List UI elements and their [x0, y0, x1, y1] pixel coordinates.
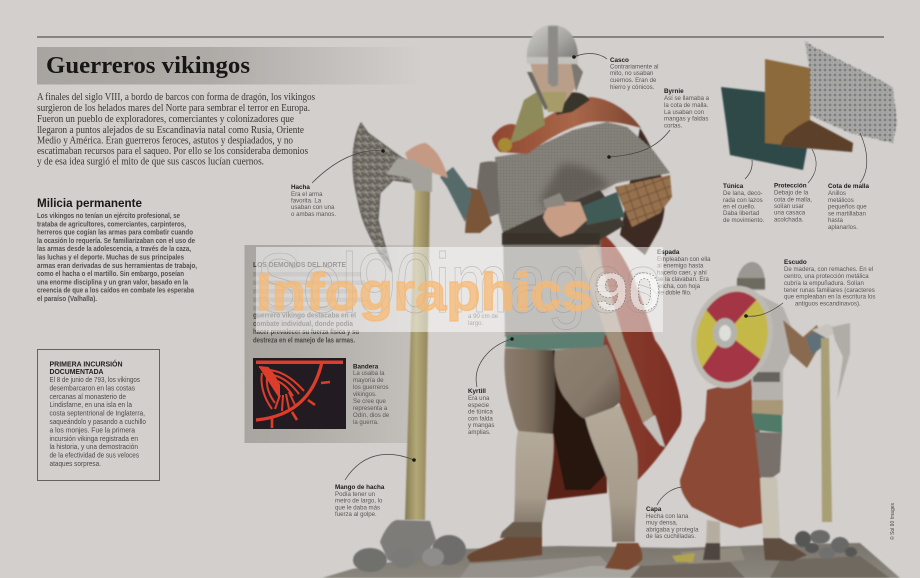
callout: Protección: Protección: [774, 182, 807, 190]
callout: Túnica: Daba libertad: [723, 210, 759, 217]
section body: las luchas y el deporte. Muchas de sus principales: [37, 252, 184, 262]
panel body: guerrero vikingo destacaba en el: [253, 310, 356, 320]
intro text: escatimaban recursos para el saqueo. Por ello se los consideraba demonios: [37, 146, 308, 157]
callout: Protección: cota de malla,: [774, 196, 812, 204]
back warrior helmet: [737, 262, 765, 290]
callout: Hacha: favorita. La: [291, 198, 322, 204]
label: Bandera: Bandera: [353, 364, 379, 370]
label fragment under watermark: largo.: [468, 320, 484, 327]
callout: Hacha: o ambas manos.: [291, 211, 336, 218]
label: Bandera: representa a: [353, 405, 388, 412]
callout: Túnica: De lana, deco-: [723, 190, 763, 197]
top rule: [37, 36, 884, 38]
callout: Byrnie: mangas y faldas: [664, 116, 708, 122]
axe socket: [386, 158, 432, 192]
callout: Espada: al enemigo hasta: [657, 263, 704, 270]
callout: Cota de malla: se martillaban: [828, 210, 866, 218]
section body: la ocasión lo requería. Se familiarizaban con el uso de: [37, 236, 195, 245]
callout: Cota de malla: hasta: [828, 217, 844, 224]
tunic skirt and hem: [503, 235, 606, 350]
callout: Espada: Empleaban con ella: [657, 256, 711, 263]
section body: herreros que cogían las armas para combatir cuando: [37, 228, 193, 236]
callout box: Primera incursión documentada: DOCUMENTADA: [50, 369, 104, 376]
intro text: y de esa idea surgió el mito de que sus cascos lucían cuernos.: [37, 156, 264, 168]
intro text: Fueron un pueblo de exploradores, comerciantes y colonizadores que: [37, 114, 294, 125]
leg wraps: [500, 405, 638, 542]
callout: Casco: Contrariamente al: [610, 64, 658, 70]
callout: Protección: una casaca: [774, 210, 806, 217]
intro text: A finales del siglo VIII, a bordo de barcos con forma de dragón, los vikingos: [37, 92, 315, 103]
callout: Túnica: [723, 160, 765, 224]
callout: Casco: Casco: [610, 57, 629, 64]
section body: las armas desde la adolescencia, a través de la caza,: [37, 244, 191, 253]
callout: Kyrtill: y mangas: [468, 422, 494, 429]
panel body: combate individual, donde podía: [253, 319, 354, 328]
section body: el paraíso (Valhalla).: [37, 294, 97, 303]
callout box: Primera incursión documentada: la historia, y una demostración: [50, 442, 138, 451]
callout box: Primera incursión documentada: Lindisfarne, en una isla en la: [50, 400, 133, 409]
intro text: Medio y América. Eran guerreros feroces, astutos y despiadados, y no: [37, 136, 293, 146]
watermark: Sol90images: [256, 236, 660, 330]
belt: [502, 233, 600, 245]
callout: Túnica: Túnica: [723, 183, 744, 190]
ground platform: [322, 543, 900, 578]
trousers: [504, 345, 620, 434]
callout: Casco: mito, no usaban: [610, 70, 653, 77]
label: Bandera: [353, 364, 390, 426]
section body: Los vikingos no tenían un ejército profesional, se: [37, 211, 180, 220]
sword and scabbard: [578, 245, 665, 447]
callout: Mango de hacha: Podía tener un: [335, 491, 375, 498]
section body: una enorme disciplina y un gran valor, basado en la: [37, 277, 189, 286]
callout: Byrnie: [607, 88, 710, 159]
head and helmet: [510, 25, 590, 143]
callout box: Primera incursión documentada: [38, 350, 160, 480]
callout: Escudo: antiguos escandinavos).: [795, 300, 861, 308]
callout box: Primera incursión documentada: incursión vikinga registrada en: [50, 434, 138, 443]
callout: Espada: de doble filo.: [657, 290, 692, 297]
panel body: destreza en el manejo de las armas.: [253, 336, 355, 344]
back warrior torso: [748, 290, 797, 433]
panel body: [253, 310, 359, 344]
label fragment under watermark: a 90 cm de: [468, 313, 499, 320]
callout: Capa: de las cuchilladas.: [646, 533, 696, 540]
label: Bandera: Odín, dios de: [353, 412, 390, 419]
axe: [353, 123, 440, 520]
callout: Espada: [657, 249, 711, 297]
callout: Hacha: usaban con una: [291, 204, 335, 211]
callout box: Primera incursión documentada: El 8 de junio de 793, los vikingos: [50, 375, 140, 384]
callout: Kyrtill: [468, 337, 514, 436]
callout: Espada: ancha, con hoja: [657, 283, 701, 290]
callout: Escudo: [744, 259, 875, 318]
callout box: Primera incursión documentada: ataques sorpresa.: [50, 459, 101, 468]
rocks right: [795, 530, 857, 559]
callout: Protección: acolchada.: [774, 217, 804, 224]
back cape: [547, 128, 682, 500]
callout: Kyrtill: especie: [468, 402, 490, 409]
hand on sword: [543, 193, 587, 237]
label: Bandera: los guerreros: [353, 384, 389, 391]
callout: Hacha: Era el arma: [291, 191, 323, 198]
callout: Espada: Espada: [657, 249, 680, 256]
callout: Escudo: De madera, con remaches. En el: [784, 266, 873, 273]
section: Milicia permanente: [37, 196, 197, 303]
back warrior cape: [680, 378, 763, 528]
callout box: Primera incursión documentada: desembarcaron en las costas: [50, 383, 135, 392]
callout: Hacha: Hacha: [291, 184, 310, 191]
torso chainmail: [477, 122, 670, 245]
callout: Capa: muy densa,: [646, 520, 678, 526]
panel body: hacer prevalecer su fuerza física y su: [253, 327, 359, 336]
callout: Túnica: de movimiento.: [723, 217, 765, 224]
section body: [37, 211, 197, 303]
panel: Los demonios del norte background: [244, 245, 416, 443]
callout: Mango de hacha: fuerza al golpe.: [335, 511, 377, 518]
swatch: chain mail: [805, 41, 897, 143]
callout: Capa: Capa: [646, 506, 662, 513]
callout: Túnica: rada con lazos: [723, 197, 763, 204]
callout box: Primera incursión documentada: a los monjes. Fue la primera: [50, 425, 136, 434]
label: Bandera: Se cree que: [353, 398, 386, 405]
callout: Capa: Hecha con lana: [646, 513, 689, 520]
panel heading: LOS DEMONIOS DEL NORTE: [253, 260, 346, 269]
section body: trataba de agricultores, comerciantes, carpinteros,: [37, 219, 186, 228]
callout: Casco: [572, 53, 658, 91]
label: Bandera: mayoría de: [353, 377, 384, 384]
callout: Byrnie: La usaban con: [664, 109, 704, 116]
callout: Byrnie: Byrnie: [664, 88, 684, 95]
callout: Byrnie: cortas.: [664, 122, 683, 130]
callout: Escudo: cubría la empuñadura. Solían: [784, 280, 864, 287]
panel text: Los demonios del norte: [253, 260, 365, 344]
callout: Hacha: [291, 149, 385, 218]
callout: Protección: Debajo de la: [774, 190, 809, 196]
callout: Cota de malla: pequeños que: [828, 204, 867, 210]
title band: [37, 47, 422, 84]
callout: Cota de malla: metálicos: [828, 197, 854, 204]
intro text: surgieron de los helados mares del Norte para sembrar el terror en Europa.: [37, 103, 310, 114]
callout: Casco: cuernos. Eran de: [610, 77, 657, 84]
watermark: 90: [595, 263, 661, 322]
callout box: Primera incursión documentada: cercanas al monasterio de: [50, 392, 126, 401]
callout: Mango de hacha: metro de largo, lo: [335, 498, 383, 504]
section body: creencia de que a los caídos en combate les esperaba: [37, 286, 195, 295]
callout: Capa: abrigaba y protegía: [646, 526, 699, 534]
back warrior arm: [783, 320, 840, 368]
intro text: [37, 92, 315, 168]
callout: Kyrtill: Kyrtill: [468, 388, 486, 395]
callout: Byrnie: la cota de malla.: [664, 102, 709, 109]
callout box: Primera incursión documentada: saqueándolo y pasando a cuchillo: [50, 417, 146, 426]
callout: Cota de malla: [828, 133, 869, 231]
shield: [691, 284, 769, 390]
callout: Escudo: centro, una protección metálica: [784, 273, 869, 280]
callout: Mango de hacha: que le daba más: [335, 504, 380, 512]
main viking warrior: [405, 25, 682, 570]
callout: Cota de malla: aplanarlos.: [828, 224, 858, 231]
swatch: leather protection: [765, 59, 853, 152]
callout: Escudo: Escudo: [784, 259, 807, 266]
callout: Protección: solían usar: [774, 203, 804, 210]
callout: Protección: [774, 149, 816, 224]
boots: [467, 537, 642, 570]
section body: armas eran derivadas de sus herramientas de trabajo,: [37, 261, 197, 270]
callout: Espada: hacerlo caer, y ahí: [657, 269, 707, 276]
back warrior with shield: [680, 262, 850, 561]
callout: Escudo: que empleaban en la escritura los: [784, 294, 875, 300]
label: Bandera: vikingos.: [353, 391, 377, 398]
callout: Kyrtill: de túnica: [468, 408, 493, 416]
axe handle: [405, 190, 430, 520]
right vambrace and forearm: [580, 175, 672, 227]
callout box: Primera incursión documentada: costa septentrional de Inglaterra,: [50, 409, 145, 418]
label: Bandera: La usaba la: [353, 370, 385, 377]
axe head: [353, 123, 415, 272]
shoulder scarf: [492, 97, 641, 154]
callout: Casco: hierro y cónicos.: [610, 84, 655, 91]
callout: Túnica: en el cuello.: [723, 204, 756, 210]
label fragment under watermark: [468, 313, 499, 327]
intro text: llegaron a puntos alejados de su Escandinavia natal como Rusia, Oriente: [37, 125, 304, 136]
callout: Mango de hacha: Mango de hacha: [335, 484, 385, 491]
watermark: Infographics: [256, 263, 593, 322]
credit: © Sol 90 Images: [889, 503, 896, 540]
callout: Mango de hacha: [335, 454, 416, 518]
icon: raven flag: [253, 358, 346, 429]
left sleeve and forearm: [405, 143, 492, 233]
rocks left: [353, 520, 466, 572]
callout: Cota de malla: Anillos: [828, 190, 846, 197]
material swatches: [721, 41, 897, 170]
callout box: Primera incursión documentada: de la efectividad de sus veloces: [50, 451, 139, 460]
callout: Capa: [646, 487, 699, 540]
back warrior legs: [703, 432, 807, 561]
callout: Escudo: tener runas familiares (caracteres: [784, 287, 875, 294]
callout: Kyrtill: amplias.: [468, 429, 491, 436]
hand fingers: [408, 145, 440, 170]
swatch: tunic: [721, 87, 807, 170]
title: Guerreros vikingos: [46, 53, 250, 79]
callout: Cota de malla: Cota de malla: [828, 183, 869, 190]
callout: Byrnie: Así se llamaba a: [664, 95, 710, 102]
section heading: Milicia permanente: [37, 196, 142, 210]
callout box: Primera incursión documentada: PRIMERA INCURSIÓN: [50, 360, 122, 368]
section body: como el hacha o el martillo. Sin embargo, poseían: [37, 269, 184, 278]
callout: Kyrtill: Era una: [468, 395, 490, 402]
back warrior axe: [821, 323, 850, 522]
callout: Espada: se la clavaban. Era: [657, 276, 709, 283]
callout: Kyrtill: con falda: [468, 416, 493, 422]
label: Bandera: la guerra.: [353, 419, 379, 426]
